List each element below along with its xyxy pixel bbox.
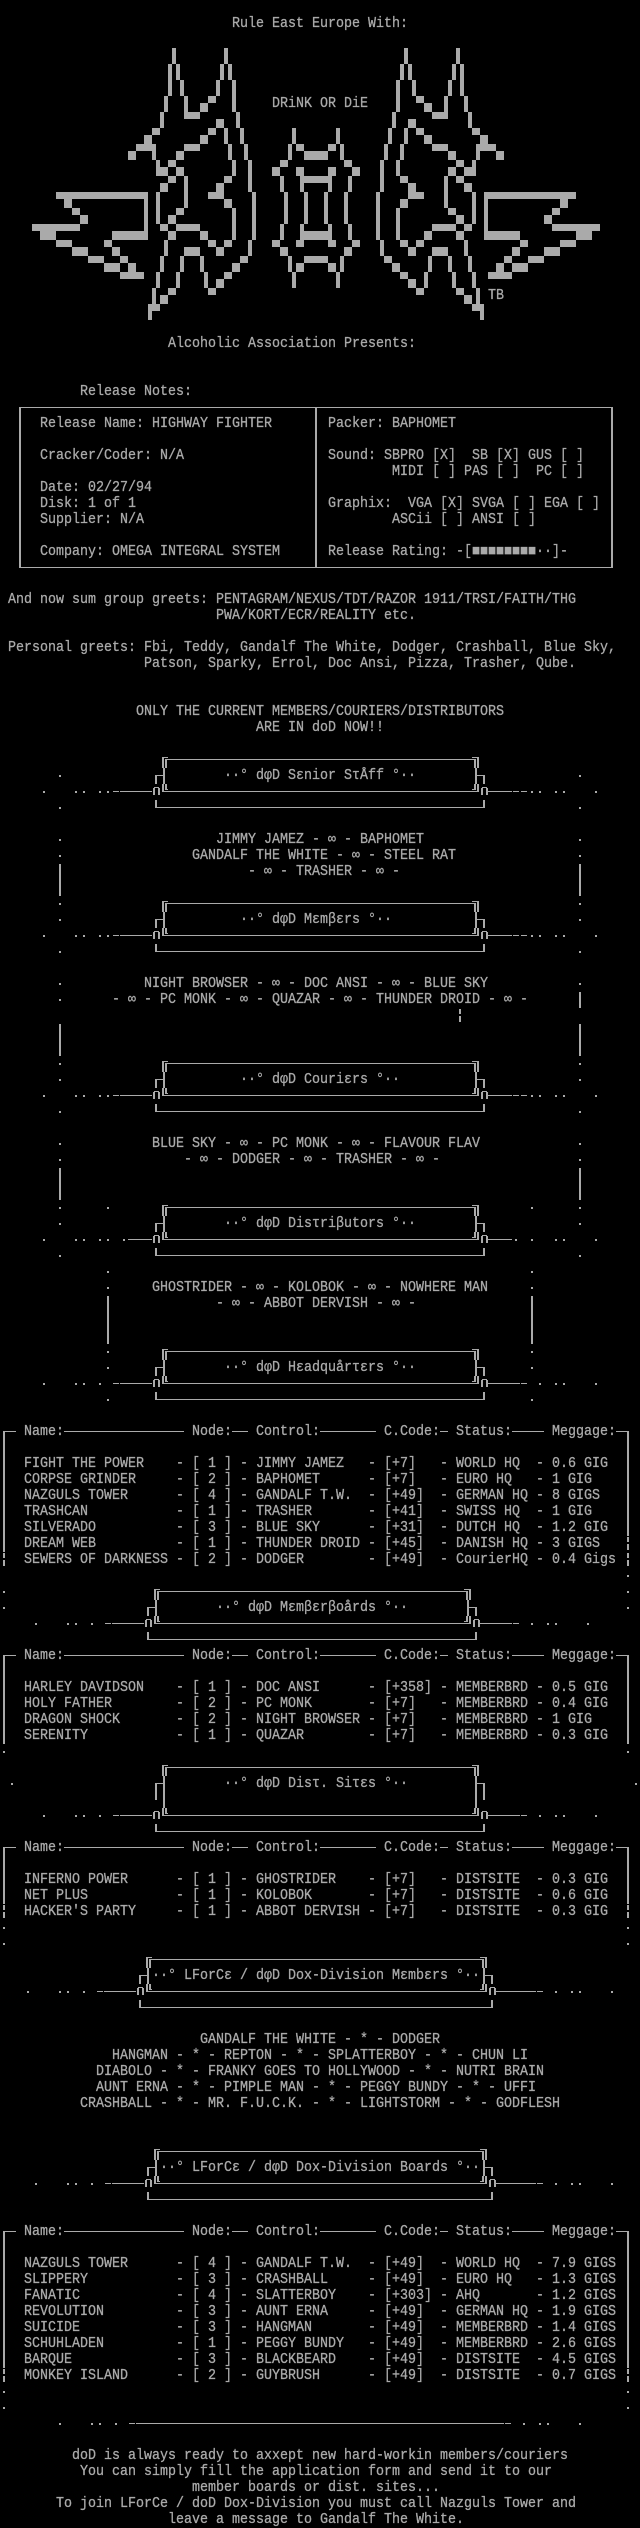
table frame: headquarters: [3, 1431, 629, 1608]
table rows: headquarters: FIGHT THE POWER - [ 1 ] - JIMMY JAMEZ - [+7] - WORLD HQ - 0.6 GIG CORPSE GRINDER - [ 2 ] - BAPHOMET - [+7] - EURO HQ - 1 GIG NAZGULS TOWER - [ 4 ] - GANDALF T.W. - [+49] - GERMAN HQ - 8 GIGS TRASHCAN - [ 1 ] - TRASHER - [+41] - SWISS HQ - 1 GIG SILVERADO - [ 3 ] - BLUE SKY - [+31] - DUTCH HQ - 1.2 GIG DREAM WEB - [ 1 ] - THUNDER DROID - [+45] - DANISH HQ - 3 GIGS SEWERS OF DARKNESS - [ 2 ] - DODGER - [+49] - CourierHQ - 0.4 Gigs: [24, 1455, 616, 1568]
section title: dox-division boards: ··° LForCε / dφD Dox-Division Boards °··: [160, 2159, 480, 2176]
group greets: And now sum group greets: PENTAGRAM/NEXUS/TDT/RAZOR 1911/TRSI/FAITH/THG PWA/KORT/ECR/REALITY etc.: [8, 591, 576, 624]
section title: couriers: ··° dφD Couriεrs °··: [240, 1071, 400, 1088]
frame: distributors: [43, 1205, 597, 1256]
table frame: dox-division boards: [3, 2231, 629, 2408]
section title: headquarters: ··° dφD Hεadquårτεrs °··: [224, 1359, 416, 1376]
frame: headquarters: [43, 1349, 597, 1400]
side rails around staff sections: [59, 776, 581, 1400]
heading: rule east europe: Rule East Europe With:: [232, 15, 408, 32]
section title: dox-division members: ··° LForCε / dφD Dox-Division Mεmbεrs °··: [152, 1967, 480, 1984]
members notice: ONLY THE CURRENT MEMBERS/COURIERS/DISTRIBUTORS ARE IN doD NOW!!: [136, 703, 504, 736]
table rows: distribution sites: INFERNO POWER - [ 1 ] - GHOSTRIDER - [+7] - DISTSITE - 0.3 GIG NET PLUS - [ 1 ] - KOLOBOK - [+7] - DISTSITE - 0.6 GIG HACKER'S PARTY - [ 1 ] - ABBOT DERVISH - [+7] - DISTSITE - 0.3 GIG: [24, 1871, 608, 1920]
table header: dox-division boards: Name: Node: Control: C.Code: Status: Meggage:: [24, 2223, 616, 2240]
heading: presents: Alcoholic Association Presents:: [168, 335, 416, 352]
frame: couriers: [43, 1061, 597, 1112]
release details left: Release Name: HIGHWAY FIGHTER Cracker/Coder: N/A Date: 02/27/94 Disk: 1 of 1 Supplier: N/A Company: OMEGA INTEGRAL SYSTEM: [40, 415, 280, 560]
section title: members: ··° dφD Mεmβεrs °··: [240, 911, 392, 928]
senior staff names: JIMMY JAMEZ - ∞ - BAPHOMET GANDALF THE WHITE - ∞ - STEEL RAT - ∞ - TRASHER - ∞ -: [192, 831, 456, 880]
personal greets: Personal greets: Fbi, Teddy, Gandalf The White, Dodger, Crashball, Blue Sky, Patson, Sparky, Errol, Doc Ansi, Pizza, Trasher, Qube.: [8, 639, 616, 672]
table frame: distribution sites: [3, 1847, 629, 1944]
closing message: doD is always ready to axxept new hard-workin members/couriers You can simply fill the application form and send it to our member boards or dist. sites... To join LForCe / doD Dox-Division you must call Nazguls Tower and leave a message to Gandalf The White.: [56, 2447, 576, 2528]
table rows: dox-division boards: NAZGULS TOWER - [ 4 ] - GANDALF T.W. - [+49] - WORLD HQ - 7.9 GIGS SLIPPERY - [ 3 ] - CRASHBALL - [+49] - EURO HQ - 1.3 GIGS FANATIC - [ 4 ] - SLATTERBOY - [+303] - AHQ - 1.2 GIGS REVOLUTION - [ 3 ] - AUNT ERNA - [+49] - GERMAN HQ - 1.9 GIGS SUICIDE - [ 3 ] - HANGMAN - [+49] - MEMBERBRD - 1.4 GIGS SCHUHLADEN - [ 1 ] - PEGGY BUNDY - [+49] - MEMBERBRD - 2.6 GIGS BARQUE - [ 3 ] - BLACKBEARD - [+49] - DISTSITE - 4.5 GIGS MONKEY ISLAND - [ 2 ] - GUYBRUSH - [+49] - DISTSITE - 0.7 GIGS: [24, 2255, 616, 2384]
distributor names: GHOSTRIDER - ∞ - KOLOBOK - ∞ - NOWHERE MAN - ∞ - ABBOT DERVISH - ∞ -: [152, 1279, 488, 1312]
section title: memberboards: ··° dφD Mεmβεrβoårds °··: [216, 1599, 408, 1616]
release details right: Packer: BAPHOMET Sound: SBPRO [X] SB [X] GUS [ ] MIDI [ ] PAS [ ] PC [ ] Graphix: VGA [X] SVGA [ ] EGA [ ] ASCii [ ] ANSI [ ] Release Rating: -[■■■■■■■■··]-: [328, 415, 600, 560]
dox-division member names: GANDALF THE WHITE - * - DODGER HANGMAN - * - REPTON - * - SPLATTERBOY - * - CHUN LI DIABOLO - * - FRANKY GOES TO HOLLYWOOD - * - NUTRI BRAIN AUNT ERNA - * - PIMPLE MAN - * - PEGGY BUNDY - * - UFFI CRASHBALL - * - MR. F.U.C.K. - * - LIGHTSTORM - * - GODFLESH: [80, 2031, 560, 2112]
table header: distribution sites: Name: Node: Control: C.Code: Status: Meggage:: [24, 1839, 616, 1856]
frame: senior staff: [43, 757, 597, 808]
table header: headquarters: Name: Node: Control: C.Code: Status: Meggage:: [24, 1423, 616, 1440]
frame: members: [43, 901, 597, 952]
section title: distributors: ··° dφD Disτriβutors °··: [224, 1215, 416, 1232]
frame: memberboards: [35, 1589, 589, 1640]
courier names: BLUE SKY - ∞ - PC MONK - ∞ - FLAVOUR FLAV - ∞ - DODGER - ∞ - TRASHER - ∞ -: [152, 1135, 480, 1168]
logo signature: TB: [488, 287, 504, 304]
frame: dox-division boards: [35, 2149, 613, 2200]
table rows: memberboards: HARLEY DAVIDSON - [ 1 ] - DOC ANSI - [+358] - MEMBERBRD - 0.5 GIG HOLY FATHER - [ 2 ] - PC MONK - [+7] - MEMBERBRD - 0.4 GIG DRAGON SHOCK - [ 2 ] - NIGHT BROWSER - [+7] - MEMBERBRD - 1 GIG SERENITY - [ 1 ] - QUAZAR - [+7] - MEMBERBRD - 0.3 GIG: [24, 1679, 608, 1744]
closing rule: [59, 2422, 581, 2425]
table header: memberboards: Name: Node: Control: C.Code: Status: Meggage:: [24, 1647, 616, 1664]
frame: dox-division members: [27, 1957, 613, 2008]
panel: release notes box outline: [19, 407, 613, 568]
logo: DoD block art: [32, 56, 600, 316]
heading: release notes: Release Notes:: [80, 383, 192, 400]
frame: distribution sites: [43, 1765, 597, 1832]
section title: distribution sites: ··° dφD Disτ. Siτεs °··: [224, 1775, 408, 1792]
table frame: memberboards: [3, 1655, 637, 1784]
member names: NIGHT BROWSER - ∞ - DOC ANSI - ∞ - BLUE SKY - ∞ - PC MONK - ∞ - QUAZAR - ∞ - THUNDER DROID - ∞ -: [112, 975, 528, 1008]
section title: senior staff: ··° dφD Sεnior SτÅff °··: [224, 767, 416, 784]
logo caption: DRiNK OR DiE: [272, 95, 368, 112]
